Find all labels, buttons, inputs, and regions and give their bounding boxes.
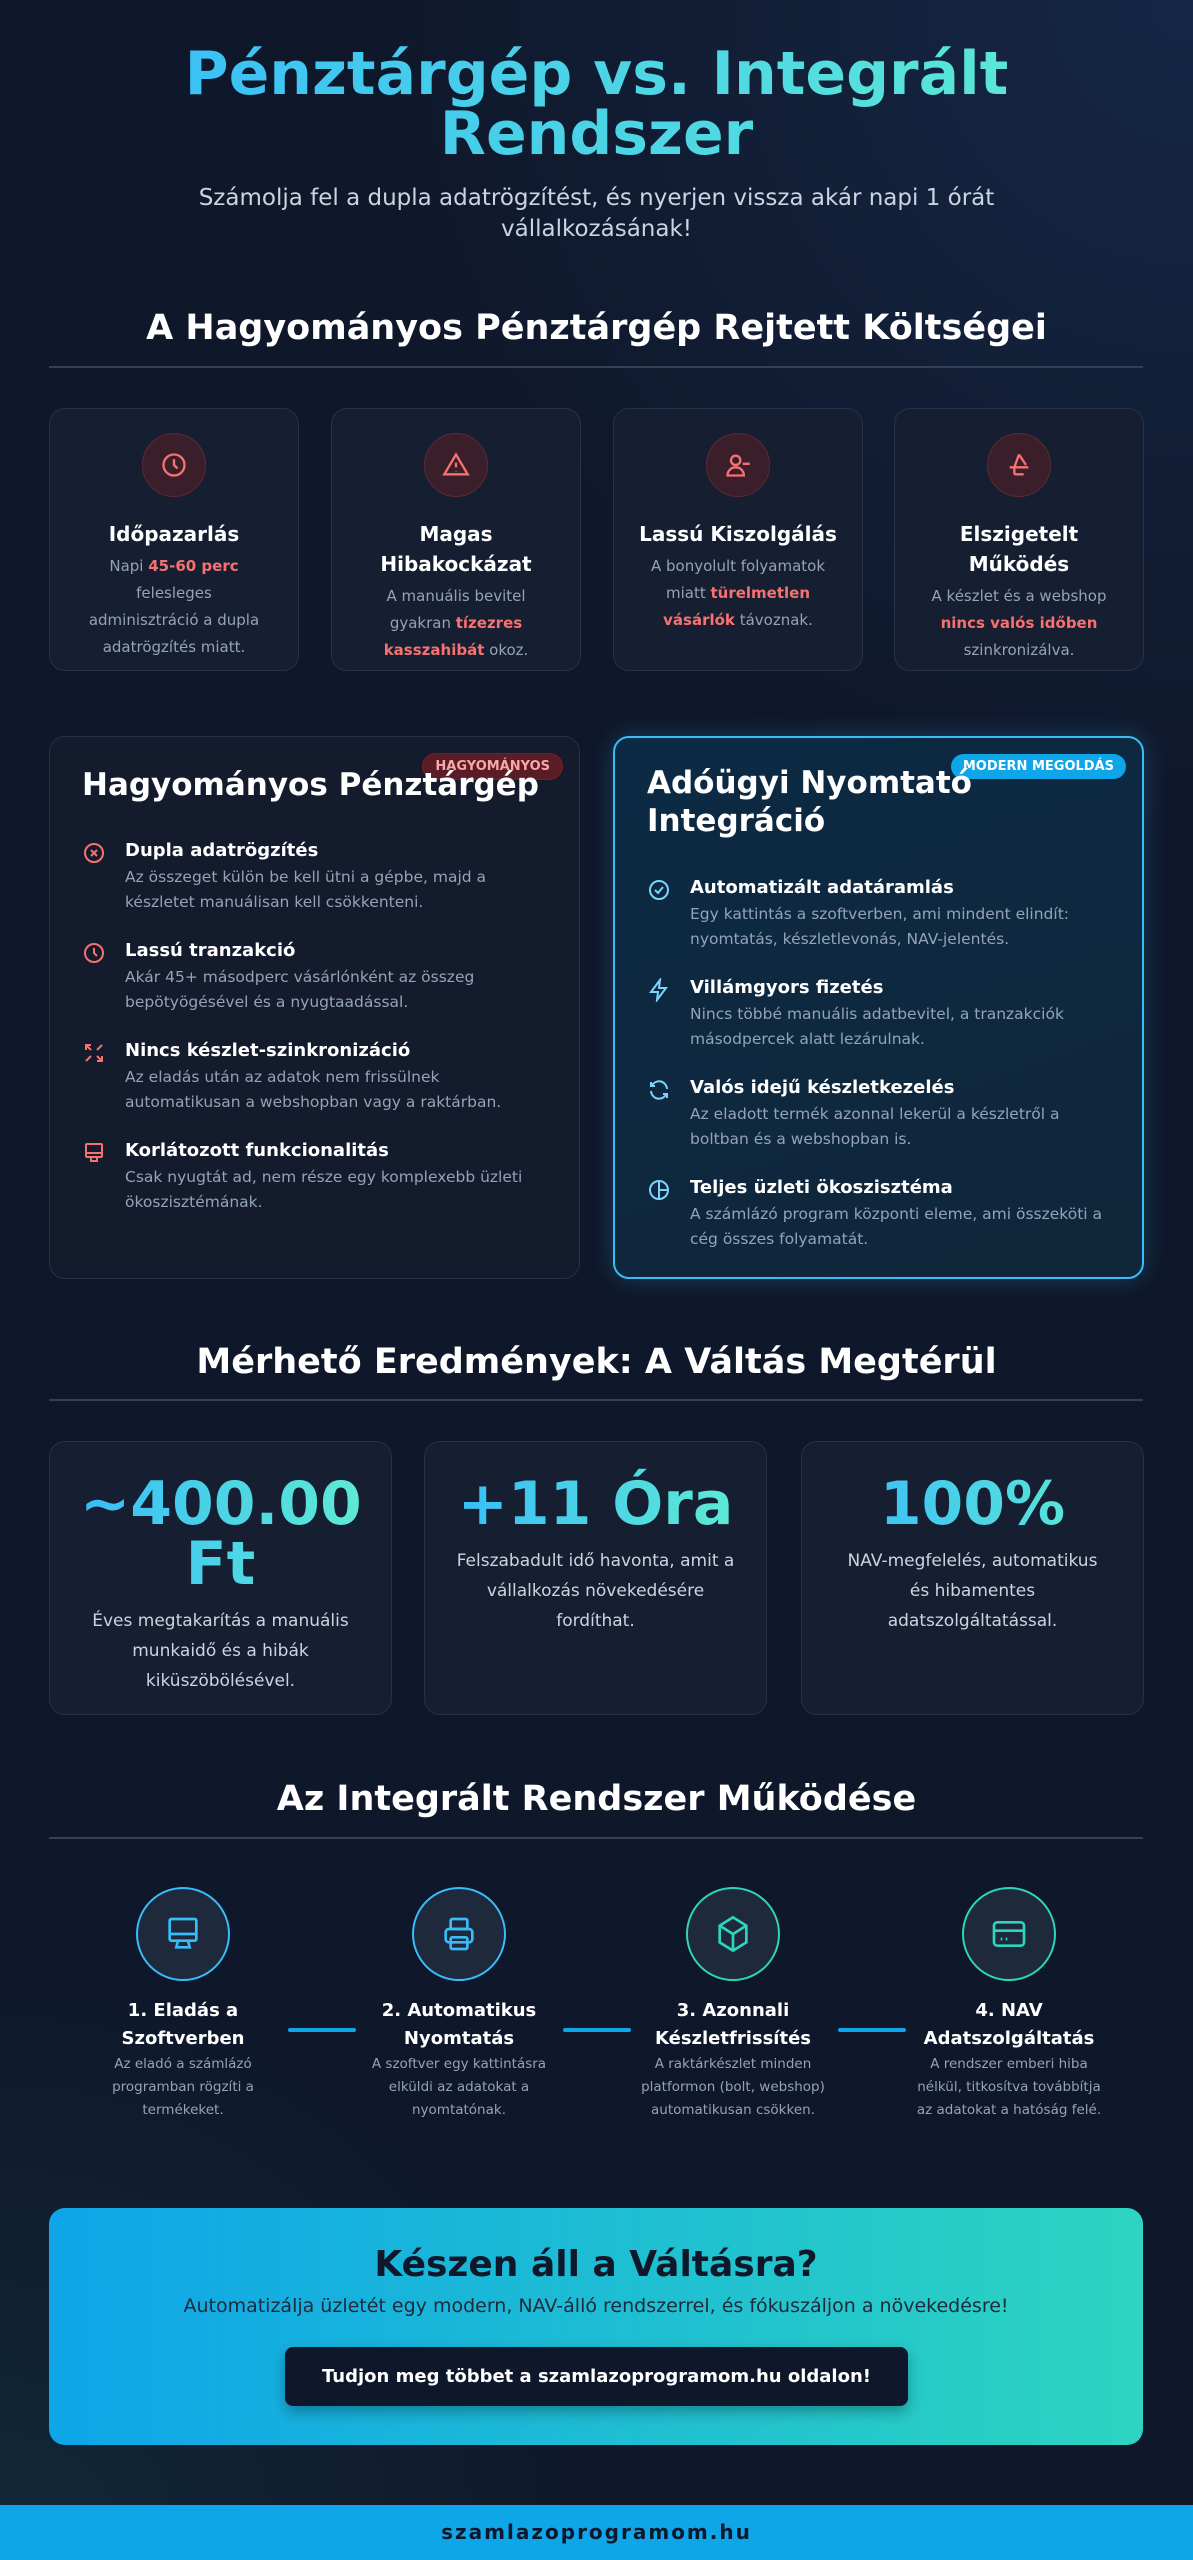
item: ökoszisztéma: A számlázó program központi eleme, ami összeköti a cég összes folyamatát. bbox=[690, 1205, 1102, 1248]
step 2 text: A szoftver egy kattintásra elküldi az adatokat a nyomtatónak. bbox=[372, 2056, 546, 2118]
CTA box: Készen áll a Váltásra? bbox=[374, 2244, 818, 2285]
step 4 text: 4. NAV Adatszolgáltatás bbox=[924, 2000, 1094, 2049]
heading: results: Mérhető Eredmények: A Váltás Megtérül bbox=[196, 1342, 997, 1382]
item: dupla bbox=[84, 840, 486, 911]
button: Tudjon meg többet a szamlazoprogramom.hu oldalon! bbox=[322, 2366, 871, 2387]
card: Hibakockázat: A manuális bevitel gyakran tízezres kasszahibát okoz. bbox=[384, 587, 528, 659]
card: Lassú kiszolgálás: A bonyolult folyamatok miatt türelmetlen vásárlók távoznak. bbox=[651, 557, 825, 629]
CTA box: Automatizálja üzletét egy modern, NAV-álló rendszerrel, és fókuszáljon a növekedésre! bbox=[183, 2295, 1009, 2317]
item: automatizált: Egy kattintás a szoftverben, ami mindent elindít: nyomtatás, készletlevonás, NAV-jelentés. bbox=[690, 905, 1069, 948]
card: Lassú kiszolgálás: Lassú Kiszolgálás bbox=[639, 522, 837, 546]
step 2 icon bbox=[412, 1887, 506, 1981]
stat: hours: Felszabadult idő havonta, amit a vállalkozás növekedésére fordíthat. bbox=[457, 1551, 734, 1631]
item: dupla: Dupla adatrögzítés bbox=[125, 840, 318, 861]
stat: hours bbox=[424, 1441, 767, 1715]
icon: warning bbox=[424, 433, 488, 497]
badge: hagyományos: HAGYOMÁNYOS bbox=[435, 759, 550, 774]
item: ökoszisztéma bbox=[649, 1177, 1102, 1248]
step 3 text: A raktárkészlet minden platformon (bolt, webshop) automatikusan csökken. bbox=[641, 2056, 825, 2118]
CTA box bbox=[49, 2208, 1143, 2445]
stat: 100% bbox=[801, 1441, 1144, 1715]
item: lassú bbox=[84, 940, 474, 1011]
stat: 100%: NAV-megfelelés, automatikus és hibamentes adatszolgáltatással. bbox=[848, 1551, 1097, 1631]
item: nincs szinkron: Az eladás után az adatok nem frissülnek automatikusan a webshopban vagy a raktárban. bbox=[125, 1068, 501, 1111]
title: Pénztárgép vs. Integrált Rendszer bbox=[185, 39, 1008, 169]
step 3 text: 3. Azonnali Készletfrissítés bbox=[655, 2000, 811, 2049]
step 1 text: 1. Eladás a Szoftverben bbox=[122, 2000, 244, 2049]
item: lassú: Lassú tranzakció bbox=[125, 940, 295, 961]
item: nincs szinkron bbox=[85, 1040, 501, 1111]
item: automatizált: Automatizált adatáramlás bbox=[690, 877, 954, 898]
panel: traditional bbox=[49, 736, 580, 1279]
card: Lassú kiszolgálás bbox=[613, 408, 863, 671]
item: korlátozott: Csak nyugtát ad, nem része egy komplexebb üzleti ökoszisztémának. bbox=[125, 1168, 522, 1211]
card: Elszigetelt: Elszigetelt Működés bbox=[960, 522, 1078, 576]
panel title: Integráció bbox=[647, 803, 825, 839]
step 4 icon bbox=[962, 1887, 1056, 1981]
step 1 text: Az eladó a számlázó programban rögzíti a termékeket. bbox=[112, 2056, 254, 2118]
step 1 icon bbox=[136, 1887, 230, 1981]
item: villámgyors: Villámgyors fizetés bbox=[690, 977, 883, 998]
card: Elszigetelt bbox=[894, 408, 1144, 671]
step 1 text bbox=[112, 2000, 254, 2118]
button bbox=[285, 2347, 908, 2406]
icon: clock bbox=[142, 433, 206, 497]
item: villámgyors: Nincs többé manuális adatbevitel, a tranzakciók másodpercek alatt lezárulnak. bbox=[690, 1005, 1064, 1048]
panel title: Hagyományos Pénztárgép bbox=[82, 767, 539, 803]
item: villámgyors bbox=[649, 977, 1064, 1048]
panel title bbox=[647, 765, 972, 839]
item: korlátozott: Korlátozott funkcionalitás bbox=[125, 1140, 389, 1161]
stat: savings bbox=[49, 1441, 392, 1715]
card: Hibakockázat: Magas Hibakockázat bbox=[380, 522, 532, 576]
card: Hibakockázat bbox=[331, 408, 581, 671]
badge: modern: MODERN MEGOLDÁS bbox=[963, 759, 1114, 774]
step 4 text: A rendszer emberi hiba nélkül, titkosítva továbbítja az adatokat a hatóság felé. bbox=[917, 2056, 1101, 2118]
item: valós idejű bbox=[650, 1077, 1060, 1148]
stat: 100%: 100% bbox=[880, 1469, 1065, 1539]
subtitle: Számolja fel a dupla adatrögzítést, és nyerjen vissza akár napi 1 órát vállalkozásának! bbox=[199, 185, 994, 242]
item: ökoszisztéma: Teljes üzleti ökoszisztéma bbox=[690, 1177, 953, 1198]
item: automatizált bbox=[649, 877, 1069, 948]
step 4 text bbox=[917, 2000, 1101, 2118]
icon: user minus bbox=[706, 433, 770, 497]
step 3 text bbox=[641, 2000, 825, 2118]
step 2 text: 2. Automatikus Nyomtatás bbox=[382, 2000, 536, 2049]
footer bbox=[0, 2505, 1193, 2560]
step 3 icon bbox=[686, 1887, 780, 1981]
item: korlátozott bbox=[85, 1140, 522, 1211]
stat: savings: Ft bbox=[186, 1529, 255, 1599]
icon: unlink bbox=[987, 433, 1051, 497]
stat: hours: +11 Óra bbox=[458, 1469, 733, 1539]
badge: modern bbox=[951, 754, 1126, 779]
footer: szamlazoprogramom.hu bbox=[441, 2520, 752, 2544]
item: valós idejű: Valós idejű készletkezelés bbox=[690, 1077, 954, 1098]
heading: how it works: Az Integrált Rendszer Működése bbox=[277, 1779, 916, 1819]
panel title: Adóügyi Nyomtató bbox=[647, 765, 972, 801]
item: dupla: Az összeget külön be kell ütni a gépbe, majd a készletet manuálisan kell csökkenteni. bbox=[125, 868, 486, 911]
panel: modern bbox=[613, 736, 1144, 1279]
step 2 text bbox=[372, 2000, 546, 2118]
card: Időpazarlás: Időpazarlás bbox=[109, 522, 239, 546]
heading: hidden costs: A Hagyományos Pénztárgép Rejtett Költségei bbox=[146, 308, 1047, 348]
connectors bbox=[288, 2028, 356, 2032]
card: Elszigetelt: A készlet és a webshop nincs valós időben szinkronizálva. bbox=[932, 587, 1106, 659]
stat: savings: Éves megtakarítás a manuális munkaidő és a hibák kiküszöbölésével. bbox=[92, 1611, 349, 1691]
card: Időpazarlás: Napi 45-60 perc felesleges adminisztráció a dupla adatrögzítés miatt. bbox=[89, 557, 259, 656]
item: lassú: Akár 45+ másodperc vásárlónként az összeg bepötyögésével és a nyugtaadással. bbox=[125, 968, 474, 1011]
card: Időpazarlás bbox=[49, 408, 299, 671]
stat: savings: ~400.00 bbox=[80, 1469, 362, 1539]
item: valós idejű: Az eladott termék azonnal lekerül a készletről a boltban és a webshopban is. bbox=[690, 1105, 1060, 1148]
badge: hagyományos bbox=[422, 753, 563, 780]
item: nincs szinkron: Nincs készlet-szinkronizáció bbox=[125, 1040, 410, 1061]
